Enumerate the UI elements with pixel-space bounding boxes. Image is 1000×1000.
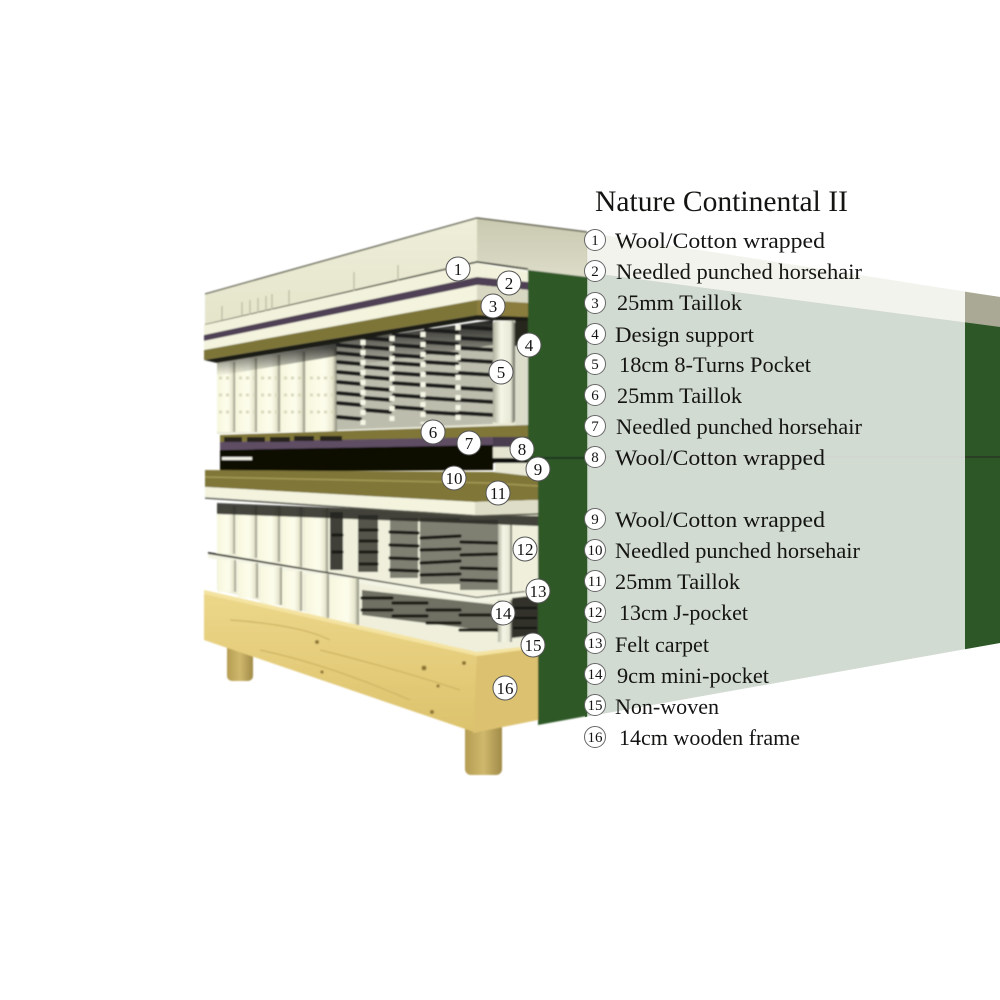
callout numbers on diagram: 2 bbox=[505, 274, 513, 293]
legend item 1: Wool/Cotton wrapped bbox=[615, 228, 825, 253]
legend item 4: Design support bbox=[615, 322, 754, 347]
legend item 12: 12 bbox=[588, 605, 602, 621]
legend item 6: 25mm Taillok bbox=[617, 383, 742, 408]
legend item 5: 18cm 8-Turns Pocket bbox=[619, 352, 811, 377]
callout numbers on diagram: 9 bbox=[534, 460, 542, 479]
legend item 12: 13cm J-pocket bbox=[619, 600, 748, 625]
legend item 7: 7 bbox=[591, 419, 599, 435]
left leg bbox=[227, 640, 253, 681]
legend list bbox=[584, 228, 863, 750]
translucent panel bbox=[587, 200, 965, 760]
legend item 16: 14cm wooden frame bbox=[619, 725, 800, 750]
callout numbers on diagram: 14 bbox=[494, 604, 512, 623]
legend item 11: 11 bbox=[588, 574, 602, 590]
legend item 14: 9cm mini-pocket bbox=[617, 663, 769, 688]
legend item 3: 25mm Taillok bbox=[617, 290, 742, 315]
callout numbers on diagram: 16 bbox=[496, 679, 514, 698]
green side panel bbox=[528, 270, 587, 725]
legend item 11: 25mm Taillok bbox=[615, 569, 740, 594]
legend item 9: 9 bbox=[591, 512, 599, 528]
legend item 10: Needled punched horsehair bbox=[615, 538, 861, 563]
comfort layers: wool, horsehair, taillok bbox=[204, 263, 528, 363]
legend item 5: 5 bbox=[591, 357, 599, 373]
legend item 2: Needled punched horsehair bbox=[616, 259, 863, 284]
legend item 13: 13 bbox=[588, 636, 602, 652]
callout numbers on diagram: 11 bbox=[490, 484, 506, 503]
callout numbers on diagram: 13 bbox=[530, 582, 546, 601]
legend item 15: 15 bbox=[588, 698, 602, 714]
callout numbers on diagram: 1 bbox=[454, 260, 462, 279]
legend item 6: 6 bbox=[591, 388, 599, 404]
title: Nature Continental II bbox=[595, 185, 848, 218]
legend item 8: Wool/Cotton wrapped bbox=[615, 445, 825, 470]
legend item 8: 8 bbox=[591, 450, 599, 466]
legend item 10: 10 bbox=[588, 543, 602, 559]
legend item 9: Wool/Cotton wrapped bbox=[615, 507, 825, 532]
callout numbers on diagram: 3 bbox=[489, 297, 497, 316]
callout numbers on diagram: 6 bbox=[429, 423, 437, 442]
upper base layers: horsehair, taillok, white layer bbox=[205, 470, 538, 516]
legend item 14: 14 bbox=[588, 667, 603, 683]
legend item 16: 16 bbox=[588, 730, 603, 746]
callout numbers on diagram: 5 bbox=[497, 363, 505, 382]
upper spring layer: pockets and coils bbox=[217, 318, 528, 434]
top pillow layer bbox=[205, 218, 587, 325]
legend item 1: 1 bbox=[591, 233, 599, 249]
callout numbers on diagram: 8 bbox=[518, 440, 526, 459]
legend item 7: Needled punched horsehair bbox=[616, 414, 863, 439]
legend item 3: 3 bbox=[591, 296, 599, 312]
legend item 13: Felt carpet bbox=[615, 632, 709, 657]
callout numbers on diagram: 10 bbox=[446, 469, 462, 488]
mattress and base cutaway bbox=[204, 218, 587, 775]
right leg bbox=[465, 722, 502, 775]
lower spring layer bbox=[208, 503, 538, 654]
callout numbers on diagram: 4 bbox=[525, 336, 534, 355]
bed side extension behind translucent panel bbox=[585, 232, 1000, 717]
wooden frame bbox=[204, 590, 538, 733]
callout numbers on diagram: 7 bbox=[465, 434, 474, 453]
legend item 4: 4 bbox=[591, 327, 599, 343]
legend item 2: 2 bbox=[591, 264, 599, 280]
callout numbers on diagram bbox=[421, 257, 550, 700]
legend item 15: Non-woven bbox=[615, 694, 719, 719]
callout numbers on diagram: 12 bbox=[516, 540, 534, 559]
callout numbers on diagram: 15 bbox=[524, 636, 542, 655]
lower comfort layers bbox=[220, 425, 538, 475]
